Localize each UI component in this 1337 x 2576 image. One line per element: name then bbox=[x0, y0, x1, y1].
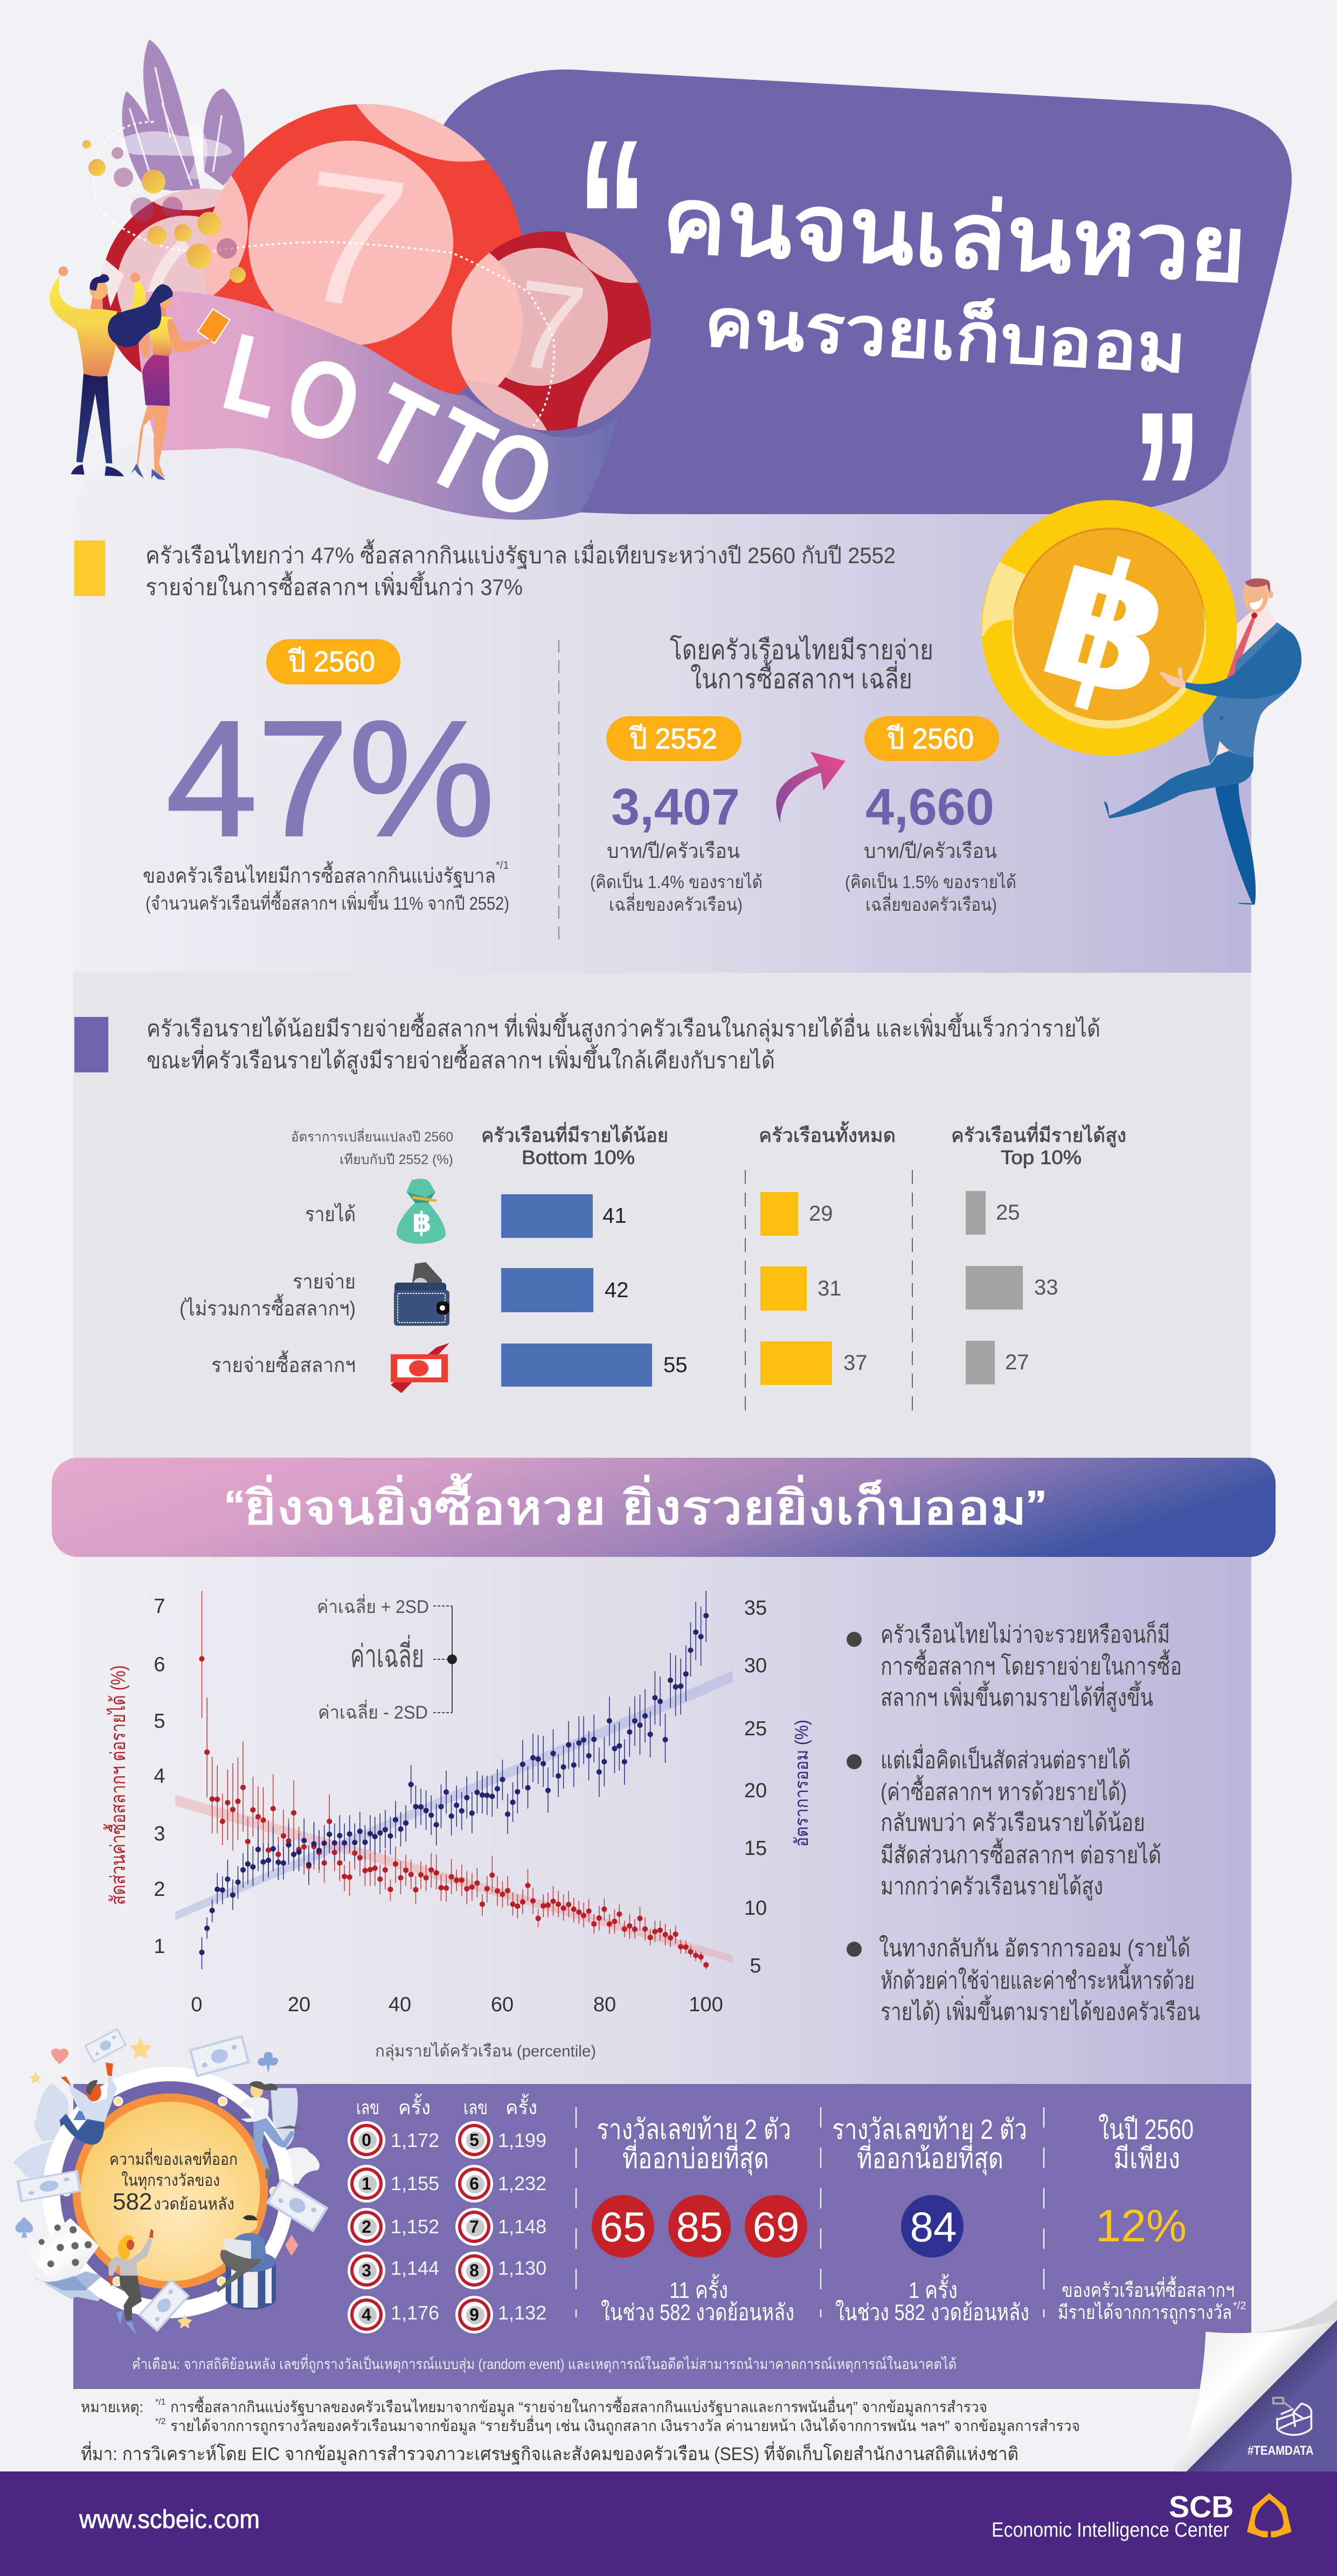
heading bbox=[1098, 2114, 1194, 2175]
unit and note 2560: (คิดเป็น 1.5% ของรายได้ bbox=[845, 871, 1016, 892]
value 4660: 4,660 bbox=[865, 778, 994, 836]
bullet two: (ค่าซื้อสลากฯ หารด้วยรายได้) bbox=[881, 1775, 1127, 1805]
row labels bbox=[179, 1203, 356, 1377]
red number balls: 85 bbox=[676, 2203, 723, 2250]
caption: มีรายได้จากการถูกรางวัล bbox=[1058, 2301, 1232, 2324]
chart: lotto share and saving rate by income percentile bbox=[103, 1591, 812, 2061]
red number balls bbox=[592, 2195, 807, 2258]
lotto lettering: O bbox=[272, 331, 375, 469]
bullet three: ในทางกลับกัน อัตราการออม (รายได้ bbox=[879, 1935, 1190, 1962]
bars: top 10 percent: 33 bbox=[1034, 1276, 1058, 1299]
lotto share points bbox=[199, 1656, 709, 1968]
title bbox=[577, 90, 1249, 627]
left lottery ball bbox=[102, 189, 222, 373]
intro text: รายจ่ายในการซื้อสลากฯ เพิ่มขึ้นกว่า 37% bbox=[146, 571, 523, 600]
frequency values: 1,155 bbox=[391, 2172, 439, 2194]
title line one: คนจนเล่นหวย bbox=[660, 169, 1249, 302]
table: digit frequency bbox=[348, 2093, 546, 2333]
ball digits: 7 bbox=[469, 2217, 479, 2236]
saving error bars bbox=[202, 1591, 706, 1969]
logo: SCB lotus bbox=[1247, 2493, 1292, 2537]
bullet three bbox=[847, 1935, 1200, 2025]
bullet two: มีสัดส่วนการซื้อสลากฯ ต่อรายได้ bbox=[881, 1838, 1161, 1868]
right axis title: อัตราการออม (%) bbox=[792, 1720, 812, 1847]
heading bbox=[832, 2114, 1027, 2176]
heading: ที่ออกน้อยที่สุด bbox=[857, 2139, 1003, 2176]
tag label: #TEAMDATA bbox=[1248, 2443, 1314, 2458]
small dark red lottery ball bbox=[452, 231, 651, 431]
blue number ball: 84 bbox=[910, 2203, 957, 2250]
banner heading: “ยิ่งจนยิ่งซื้อหวย ยิ่งรวยยิ่งเก็บออม” bbox=[225, 1474, 1045, 1534]
bars: top 10 percent: 25 bbox=[996, 1201, 1020, 1224]
frequency values: 1,199 bbox=[498, 2129, 546, 2151]
table: spending change by income group bbox=[179, 1121, 1126, 1414]
column headings bbox=[481, 1121, 1126, 1168]
stat description: (จำนวนครัวเรือนที่ซื้อสลากฯ เพิ่มขึ้น 11% จากปี 2552) bbox=[146, 890, 509, 914]
lotto lettering: O bbox=[460, 404, 570, 544]
right axis values: 30 bbox=[744, 1654, 767, 1677]
heading: มีเพียง bbox=[1113, 2143, 1180, 2175]
pill: year 2560 bbox=[266, 639, 400, 684]
revealed corner bbox=[1187, 2320, 1337, 2471]
left axis values: 3 bbox=[154, 1823, 165, 1845]
row labels: รายจ่ายซื้อสลากฯ bbox=[211, 1350, 356, 1377]
footnotes: รายได้จากการถูกรางวัลของครัวเรือนมาจากข้อมูล “รายรับอื่นๆ เช่น เงินถูกสลาก เงินรางวัล ค่านายหน้า เงินได้จากการพนัน ฯลฯ” จากข้อมูลการสำรวจ bbox=[170, 2415, 1080, 2435]
wheel text bbox=[109, 2148, 238, 2215]
closing quote: ” bbox=[1132, 362, 1203, 627]
error bar legend: ค่าเฉลี่ย + 2SD bbox=[317, 1594, 429, 1617]
column headings: Bottom 10% bbox=[522, 1146, 635, 1168]
panel: lottery statistics bbox=[73, 2084, 1251, 2389]
bars: bottom 10 percent: 41 bbox=[602, 1204, 626, 1228]
table heading: เลข bbox=[463, 2096, 488, 2118]
dotted orbit bbox=[94, 122, 554, 426]
section two intro bbox=[74, 1012, 1100, 1074]
ball digits: 3 bbox=[362, 2261, 371, 2280]
purple marker bbox=[74, 1017, 108, 1072]
x axis values: 20 bbox=[288, 1993, 310, 2016]
brand tagline: Economic Intelligence Center bbox=[992, 2519, 1229, 2542]
unit and note 2560: บาท/ปี/ครัวเรือน bbox=[864, 840, 997, 863]
trend bands and plotted points bbox=[175, 1591, 733, 1969]
ball digits: 2 bbox=[362, 2217, 371, 2236]
left axis values: 2 bbox=[154, 1878, 165, 1901]
heading: รางวัลเลขท้าย 2 ตัว bbox=[832, 2114, 1027, 2145]
frequency values: 1,232 bbox=[498, 2172, 546, 2194]
intro text bbox=[146, 539, 896, 600]
wheel text: ในทุกรางวัลของ bbox=[121, 2171, 220, 2191]
caption: ของครัวเรือนที่ซื้อสลากฯ bbox=[1062, 2276, 1235, 2301]
unit and note 2560: เฉลี่ยของครัวเรือน) bbox=[865, 892, 997, 915]
percent value: 12% bbox=[1096, 2200, 1187, 2251]
x axis values: 60 bbox=[491, 1993, 514, 2016]
frequency values: 1,172 bbox=[391, 2129, 439, 2151]
right axis values: 15 bbox=[744, 1837, 767, 1860]
illustration: businessman rolling baht coin bbox=[981, 500, 1301, 905]
stat: 47 percent bbox=[143, 639, 509, 914]
caption bbox=[835, 2274, 1029, 2325]
bullet three: หักด้วยค่าใช้จ่ายและค่าชำระหนี้หารด้วย bbox=[881, 1963, 1195, 1994]
pill label: ปี 2560 bbox=[288, 646, 375, 678]
caption: 1 ครั้ง bbox=[909, 2274, 958, 2303]
pill: year 2560 bbox=[864, 716, 999, 761]
heading: ในการซื้อสลากฯ เฉลี่ย bbox=[690, 660, 912, 694]
panel: lotto spending bbox=[73, 366, 1251, 973]
wheel artwork bbox=[13, 2029, 327, 2335]
intro text: ขณะที่ครัวเรือนรายได้สูงมีรายจ่ายซื้อสลากฯ เพิ่มขึ้นใกล้เคียงกับรายได้ bbox=[147, 1044, 775, 1074]
lotto ribbon bbox=[138, 291, 618, 520]
ball digits bbox=[362, 2130, 479, 2324]
saving rate points bbox=[199, 1613, 709, 1955]
frequency values: 1,132 bbox=[498, 2302, 546, 2324]
unit and note 2552: เฉลี่ยของครัวเรือน) bbox=[609, 892, 743, 915]
heading: โดยครัวเรือนไทยมีรายจ่าย bbox=[670, 635, 933, 665]
left axis title: สัดส่วนค่าซื้อสลากฯ ต่อรายได้ (%) bbox=[103, 1665, 130, 1905]
big percent: 47% bbox=[166, 687, 495, 870]
right axis values: 35 bbox=[744, 1597, 767, 1619]
footnotes: ที่มา: การวิเคราะห์โดย EIC จากข้อมูลการสำรวจภาวะเศรษฐกิจและสังคมของครัวเรือน (SES) ที่จัดเก็บโดยสำนักงานสถิติแห่งชาติ bbox=[81, 2441, 1019, 2465]
x axis values: 80 bbox=[593, 1993, 616, 2016]
unit and note 2552: บาท/ปี/ครัวเรือน bbox=[607, 840, 740, 863]
x axis values: 40 bbox=[389, 1993, 411, 2016]
unit and note 2552: (คิดเป็น 1.4% ของรายได้ bbox=[590, 871, 763, 892]
arrow up bbox=[776, 752, 846, 823]
purple plant leaves bbox=[121, 39, 245, 191]
footnotes bbox=[81, 2396, 1080, 2465]
section one intro bbox=[74, 539, 896, 600]
number balls bbox=[348, 2121, 493, 2333]
frequency values bbox=[391, 2129, 546, 2324]
intro text: ครัวเรือนรายได้น้อยมีรายจ่ายซื้อสลากฯ ที่เพิ่มขึ้นสูงกว่าครัวเรือนในกลุ่มรายได้อื่น และเพิ่มขึ้นเร็วกว่ารายได้ bbox=[147, 1012, 1100, 1043]
footnotes: */1 bbox=[155, 2398, 166, 2407]
chart takeaways bbox=[847, 1621, 1200, 2025]
footnotes: การซื้อสลากกินแบ่งรัฐบาลของครัวเรือนไทยมาจากข้อมูล “รายจ่ายในการซื้อสลากกินแบ่งรัฐบาลและการพนันอื่นๆ” จากข้อมูลการสำรวจ bbox=[170, 2396, 987, 2416]
lotto lettering bbox=[212, 310, 570, 544]
ball digits: 8 bbox=[469, 2261, 479, 2280]
icon: money bag bbox=[397, 1179, 446, 1244]
error bar legend: ค่าเฉลี่ย bbox=[350, 1635, 424, 1674]
bullet one: สลากฯ เพิ่มขึ้นตามรายได้ที่สูงขึ้น bbox=[881, 1680, 1153, 1712]
footer bbox=[0, 2471, 1337, 2576]
column headings: Top 10% bbox=[1001, 1146, 1082, 1168]
saving trend band bbox=[175, 1671, 733, 1920]
lotto trend band bbox=[175, 1795, 733, 1963]
right axis values: 20 bbox=[744, 1779, 767, 1802]
x axis values bbox=[191, 1993, 723, 2016]
red number balls: 69 bbox=[753, 2203, 799, 2250]
intro text bbox=[147, 1012, 1100, 1074]
unit and note 2552 bbox=[590, 840, 763, 915]
stat: 12 percent winners bbox=[1058, 2114, 1246, 2324]
caption bbox=[1058, 2276, 1246, 2324]
bullet two: มากกว่าครัวเรือนรายได้สูง bbox=[881, 1873, 1103, 1901]
footnotes: */2 bbox=[155, 2417, 166, 2426]
label 2560: ปี 2560 bbox=[886, 723, 974, 755]
table heading: ครั้ง bbox=[398, 2093, 431, 2118]
bullet one bbox=[847, 1621, 1182, 1712]
panel: income group comparison bbox=[73, 973, 1251, 1460]
bullet two: แต่เมื่อคิดเป็นสัดส่วนต่อรายได้ bbox=[881, 1743, 1131, 1774]
bars: top 10 percent: 27 bbox=[1005, 1351, 1029, 1374]
lotto lettering: L bbox=[212, 310, 294, 442]
column headings: ครัวเรือนทั้งหมด bbox=[759, 1121, 896, 1146]
icon: red bank notes bbox=[391, 1343, 449, 1393]
right axis values: 10 bbox=[744, 1897, 767, 1920]
left axis values: 4 bbox=[154, 1765, 165, 1788]
man and woman cheering bbox=[50, 266, 230, 480]
ball digits: 9 bbox=[469, 2305, 479, 2324]
right axis values: 25 bbox=[744, 1718, 767, 1740]
big red lottery ball bbox=[204, 104, 522, 394]
bars: top 10 percent bbox=[966, 1191, 1058, 1384]
wheel text: งวดย้อนหลัง bbox=[154, 2196, 234, 2213]
ball digits: 0 bbox=[362, 2130, 371, 2150]
baht coin bbox=[981, 500, 1237, 756]
bullet two bbox=[847, 1743, 1161, 1901]
bars: all households: 31 bbox=[818, 1277, 842, 1300]
caption: */2 bbox=[1233, 2300, 1246, 2312]
table heading bbox=[356, 2093, 537, 2118]
table note: เทียบกับปี 2552 (%) bbox=[340, 1152, 453, 1167]
frequency values: 1,148 bbox=[498, 2215, 546, 2238]
baht coin: ฿ bbox=[1023, 518, 1192, 737]
red number balls: 65 bbox=[600, 2203, 646, 2250]
left axis values: 7 bbox=[154, 1595, 165, 1618]
footer band bbox=[0, 2471, 1337, 2576]
x axis title: กลุ่มรายได้ครัวเรือน (percentile) bbox=[375, 2041, 596, 2061]
big red lottery ball: 7 bbox=[287, 130, 418, 350]
stat description: ของครัวเรือนไทยมีการซื้อสลากกินแบ่งรัฐบาล bbox=[143, 861, 496, 888]
ball digits: 6 bbox=[469, 2174, 479, 2193]
label 2552: ปี 2552 bbox=[629, 723, 717, 755]
ball digits: 5 bbox=[469, 2130, 479, 2150]
table heading: เลข bbox=[356, 2096, 379, 2118]
left axis values: 6 bbox=[154, 1653, 165, 1676]
stat: most frequent last two digits bbox=[592, 2114, 807, 2325]
row labels: รายจ่าย bbox=[293, 1271, 356, 1293]
bullet one: การซื้อสลากฯ โดยรายจ่ายในการซื้อ bbox=[881, 1649, 1182, 1680]
left axis values bbox=[154, 1595, 165, 1958]
row labels: รายได้ bbox=[305, 1203, 356, 1226]
heading: รางวัลเลขท้าย 2 ตัว bbox=[597, 2114, 791, 2145]
bars: bottom 10 percent: 55 bbox=[663, 1353, 688, 1377]
heading bbox=[597, 2114, 791, 2176]
businessman back parts bbox=[1104, 608, 1288, 905]
folded page bbox=[1172, 2320, 1337, 2471]
frequency values: 1,176 bbox=[391, 2302, 439, 2324]
frequency values: 1,144 bbox=[391, 2257, 439, 2279]
wheel text: 582 bbox=[113, 2189, 152, 2215]
pill: year 2552 bbox=[606, 716, 742, 761]
brand name: SCB bbox=[1169, 2490, 1234, 2524]
frequency values: 1,130 bbox=[498, 2257, 546, 2279]
panel: scatter chart background bbox=[73, 1552, 1251, 2086]
ball digits: 4 bbox=[362, 2305, 371, 2324]
small dark red lottery ball: 7 bbox=[505, 253, 593, 400]
header speech shape bbox=[377, 70, 1292, 514]
unit and note 2560 bbox=[845, 840, 1016, 915]
left axis values: 1 bbox=[154, 1935, 165, 1958]
error bar legend bbox=[317, 1594, 457, 1723]
value 3407: 3,407 bbox=[611, 778, 740, 836]
banner bbox=[52, 1458, 1276, 1557]
heading bbox=[670, 635, 933, 694]
x axis values: 100 bbox=[689, 1993, 723, 2016]
icon: money bag: ฿ bbox=[412, 1207, 432, 1238]
floating coins bbox=[82, 140, 246, 283]
page curl with team data tag bbox=[1172, 2300, 1337, 2471]
mauve bubbles bbox=[112, 147, 237, 259]
website: www.scbeic.com bbox=[79, 2505, 260, 2534]
right axis values: 5 bbox=[750, 1955, 761, 1977]
intro text: ครัวเรือนไทยกว่า 47% ซื้อสลากกินแบ่งรัฐบาล เมื่อเทียบระหว่างปี 2560 กับปี 2552 bbox=[146, 539, 896, 569]
caption: 11 ครั้ง bbox=[669, 2274, 728, 2303]
error bar legend: ค่าเฉลี่ย - 2SD bbox=[318, 1700, 428, 1723]
bullet two: กลับพบว่า ครัวเรือนรายได้น้อย bbox=[881, 1809, 1145, 1836]
wheel text: ความถี่ของเลขที่ออก bbox=[109, 2148, 238, 2169]
blue number ball bbox=[901, 2195, 964, 2258]
illustration: number frequency wheel bbox=[13, 2029, 327, 2335]
heading: ในปี 2560 bbox=[1098, 2114, 1194, 2145]
bars: bottom 10 percent bbox=[501, 1194, 688, 1387]
bars: all households bbox=[760, 1192, 868, 1385]
bars: all households: 29 bbox=[809, 1202, 833, 1225]
icon: pie chart cylinder bbox=[1273, 2398, 1311, 2435]
businessman front parts bbox=[1160, 578, 1301, 720]
illustration: lottery balls and lotto ribbon bbox=[50, 0, 781, 569]
yellow marker bbox=[74, 541, 105, 596]
title line two: คนรวยเก็บออม bbox=[702, 281, 1188, 387]
table heading: ครั้ง bbox=[505, 2093, 537, 2118]
table note: อัตราการเปลี่ยนแปลงปี 2560 bbox=[291, 1127, 453, 1145]
ball digits: 1 bbox=[362, 2174, 371, 2193]
stat description bbox=[143, 860, 509, 914]
bullet three: รายได้) เพิ่มขึ้นตามรายได้ของครัวเรือน bbox=[881, 1995, 1200, 2025]
footnotes: หมายเหตุ: bbox=[81, 2399, 143, 2416]
caption bbox=[601, 2274, 794, 2325]
lotto lettering: T bbox=[348, 361, 452, 495]
lotto lettering: T bbox=[407, 385, 511, 519]
lotto error bars bbox=[202, 1591, 706, 1969]
icon: wallet bbox=[394, 1262, 449, 1326]
stat description: */1 bbox=[496, 860, 509, 871]
column headings: ครัวเรือนที่มีรายได้สูง bbox=[951, 1122, 1126, 1147]
banner shape bbox=[52, 1458, 1276, 1557]
left axis values: 5 bbox=[154, 1710, 165, 1733]
column headings: ครัวเรือนที่มีรายได้น้อย bbox=[481, 1122, 668, 1146]
table note bbox=[291, 1127, 453, 1167]
right axis values bbox=[744, 1597, 767, 1977]
stat: least frequent last two digits bbox=[832, 2114, 1029, 2325]
x axis values: 0 bbox=[191, 1993, 203, 2016]
curl shadow edge bbox=[1251, 2300, 1337, 2333]
stat: average spending bbox=[590, 635, 1016, 915]
frequency values: 1,152 bbox=[391, 2215, 439, 2238]
bullet one: ครัวเรือนไทยไม่ว่าจะรวยหรือจนก็มี bbox=[881, 1621, 1170, 1648]
warning note: คำเตือน: จากสถิติย้อนหลัง เลขที่ถูกรางวัลเป็นเหตุการณ์แบบสุ่ม (random event) และเหตุการณ์ในอดีตไม่สามารถนำมาคาดการณ์เหตุการณ์ในอนาคตได้ bbox=[132, 2354, 957, 2373]
opening quote: “ bbox=[577, 90, 648, 355]
caption: ในช่วง 582 งวดย้อนหลัง bbox=[835, 2300, 1029, 2325]
row labels: (ไม่รวมการซื้อสลากฯ) bbox=[179, 1293, 356, 1320]
bars: all households: 37 bbox=[843, 1351, 868, 1375]
caption: ในช่วง 582 งวดย้อนหลัง bbox=[601, 2300, 794, 2325]
bars: bottom 10 percent: 42 bbox=[605, 1278, 628, 1302]
heading: ที่ออกบ่อยที่สุด bbox=[622, 2139, 769, 2176]
